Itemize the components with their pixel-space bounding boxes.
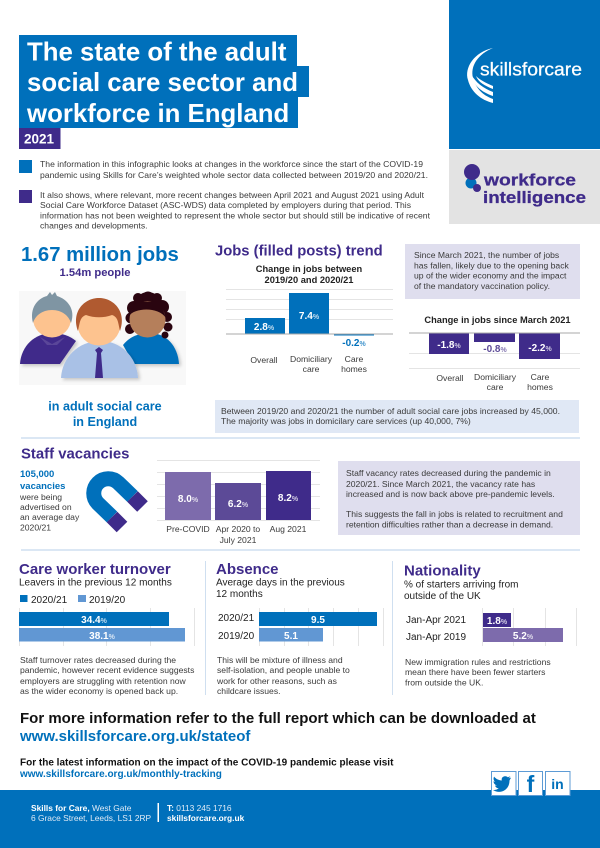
callout: jobs have fallen: Since March 2021, the number of jobs <box>414 250 559 260</box>
callout: vacancy rates: This suggests the fall in jobs is related to recruitment and <box>346 509 563 519</box>
callout: jobs increased by 45,000: The majority was jobs in domicilary care services (up 40,000, 7%) <box>221 416 471 426</box>
icon: facebook <box>518 771 542 797</box>
callout: vacancy rates: increased and is now back above pre-pandemic levels. <box>346 489 555 499</box>
footer <box>0 790 600 848</box>
call to action: monthly tracking: www.skillsforcare.org.uk/monthly-tracking <box>19 769 222 780</box>
bar chart: change in jobs since March 2021: Care <box>531 372 550 382</box>
footer: skillsforcare.org.uk <box>167 813 245 823</box>
icon: linkedin: in <box>551 776 564 792</box>
text: 105,000 vacancies: were being <box>19 492 62 502</box>
intro text: recent data: It also shows, where relevant, more recent changes between April 2021 and August 2021 using Adult <box>40 190 425 200</box>
bar chart: change in jobs since March 2021: Domiciliary <box>474 372 517 382</box>
panel: care worker turnover: as the wider economy is opened back up. <box>20 686 178 696</box>
intro text: recent data: Social Care Workforce Dataset (ASC-WDS) data completed by employers during that period. This <box>40 200 411 210</box>
call to action: full report: www.skillsforcare.org.uk/stateof <box>19 728 251 745</box>
bar chart: change in jobs since March 2021: Overall <box>436 373 464 383</box>
bar chart: change in jobs 2019/20 to 2020/21: -0.2% <box>342 338 366 349</box>
call to action: monthly tracking: For the latest information on the impact of the COVID-19 pandemic please visit <box>20 758 394 768</box>
callout: jobs have fallen: has fallen, likely due to the opening back <box>414 260 569 270</box>
bar chart: change in jobs since March 2021: -0.8% <box>483 344 508 355</box>
bar chart: change in jobs since March 2021 <box>409 315 580 392</box>
panel: care worker turnover: Leavers in the previous 12 months <box>19 578 172 588</box>
panel: care worker turnover: 2019/20 <box>89 595 126 606</box>
callout: jobs have fallen: up of the wider economy and the impact <box>414 270 567 280</box>
bar chart: change in jobs since March 2021: -1.8% <box>437 340 462 351</box>
intro text: recent data: changes and developments. <box>40 220 148 230</box>
title <box>19 35 309 128</box>
panel: absence: childcare issues. <box>217 686 281 696</box>
panel: nationality: from outside the UK. <box>405 678 483 688</box>
panel: care worker turnover: pandemic, however recent evidence suggests <box>20 665 194 675</box>
panel: absence: 5.1 <box>284 631 298 642</box>
panel: nationality: Jan-Apr 2021 <box>406 615 466 626</box>
panel: care worker turnover: Staff turnover rates decreased during the <box>20 655 176 665</box>
icon: left worker <box>20 292 76 364</box>
bar chart: change in jobs since March 2021: homes <box>527 382 553 392</box>
logo: workforce intelligence <box>449 150 600 224</box>
icon: facebook: f <box>527 771 535 797</box>
caption: in adult social care in England <box>48 400 162 429</box>
panel: absence: 2020/21 <box>218 613 255 624</box>
bar chart: change in jobs 2019/20 to 2020/21: care <box>303 364 320 374</box>
illustration: three care workers <box>19 291 186 385</box>
panel: nationality <box>404 562 576 688</box>
call to action: full report <box>19 710 536 745</box>
logo: skills for care <box>449 0 600 149</box>
callout: vacancy rates: 2020/21. Since March 2021, the vacancy rate has <box>346 479 535 489</box>
bar chart: change in jobs since March 2021: Change in jobs since March 2021 <box>424 315 571 325</box>
footer: Skills for Care, West Gate <box>31 803 132 813</box>
panel: nationality: mean there have been fewer starters <box>405 667 545 677</box>
year badge <box>19 128 60 149</box>
panel: nationality: Nationality <box>404 562 481 580</box>
panel: absence: 12 months <box>216 589 263 600</box>
panel: care worker turnover: 38.1% <box>89 631 116 642</box>
heading: staff vacancies: Staff vacancies <box>21 446 129 462</box>
panel: nationality: Jan-Apr 2019 <box>406 632 466 643</box>
panel: absence: work for other reasons, such as <box>216 676 337 686</box>
heading: jobs trend: Jobs (filled posts) trend <box>215 244 383 260</box>
text: 105,000 vacancies: vacancies <box>20 481 65 492</box>
panel: absence: 2019/20 <box>218 631 255 642</box>
text: 105,000 vacancies: an average day <box>20 512 80 522</box>
bar chart: change in jobs 2019/20 to 2020/21: homes <box>341 364 367 374</box>
bar chart: vacancy rates <box>157 460 320 545</box>
icon: right worker <box>123 292 179 364</box>
bar chart: change in jobs since March 2021: -2.2% <box>528 343 552 354</box>
bar chart: change in jobs 2019/20 to 2020/21: 7.4% <box>299 311 320 322</box>
panel: absence <box>216 561 384 696</box>
bar chart: vacancy rates: 8.2% <box>278 493 299 504</box>
footer: 6 Grace Street, Leeds, LS1 2RP <box>31 813 152 823</box>
intro text: whole sector data: The information in this infographic looks at changes in the workforce since the start of the COVID-19 <box>40 159 423 169</box>
footer: T: 0113 245 1716 <box>167 803 232 813</box>
text: 105,000 vacancies: advertised on <box>20 502 72 512</box>
callout: jobs increased by 45,000: Between 2019/20 and 2020/21 the number of adult social care jobs increased by 45,000. <box>221 406 560 416</box>
icon: magnet <box>94 479 142 527</box>
bar chart: vacancy rates: 6.2% <box>228 499 249 510</box>
caption: in adult social care in England: in England <box>73 415 137 429</box>
panel: nationality: % of starters arriving from <box>404 580 518 590</box>
panel: nationality: New immigration rules and restrictions <box>405 657 551 667</box>
panel: absence: This will be mixture of illness and <box>217 655 343 665</box>
panel: absence: Absence <box>216 561 279 578</box>
text: 105,000 vacancies: 105,000 <box>20 469 54 480</box>
panel: care worker turnover: 34.4% <box>81 615 108 626</box>
bar chart: change in jobs 2019/20 to 2020/21: 2.8% <box>254 322 275 333</box>
panel: care worker turnover <box>19 561 194 696</box>
callout: jobs have fallen <box>405 244 580 299</box>
bar chart: change in jobs 2019/20 to 2020/21: Change in jobs between <box>256 264 363 274</box>
panel: absence: 9.5 <box>311 615 325 626</box>
panel: care worker turnover: Care worker turnover <box>19 561 171 578</box>
bar chart: vacancy rates: July 2021 <box>220 535 257 545</box>
bar chart: vacancy rates: 8.0% <box>178 494 199 505</box>
panel: care worker turnover: 2020/21 <box>31 595 68 606</box>
intro text: whole sector data <box>19 159 428 180</box>
bar chart: change in jobs 2019/20 to 2020/21: Overall <box>250 355 278 365</box>
icon: twitter <box>492 772 516 796</box>
bar chart: change in jobs 2019/20 to 2020/21 <box>226 264 393 374</box>
bar chart: change in jobs 2019/20 to 2020/21: 2019/20 and 2020/21 <box>265 275 353 285</box>
panel: nationality: outside of the UK <box>404 591 481 602</box>
call to action: monthly tracking <box>19 758 394 780</box>
year badge: 2021 <box>24 132 55 146</box>
headline: 1.67 million jobs <box>21 244 179 279</box>
bar chart: change in jobs 2019/20 to 2020/21: Care <box>345 354 364 364</box>
title: workforce in England <box>26 100 289 128</box>
title: social care sector and <box>27 69 298 97</box>
logo: workforce intelligence: intelligence <box>483 188 586 207</box>
headline: 1.67 million jobs: 1.54m people <box>60 267 130 279</box>
bar chart: vacancy rates: Aug 2021 <box>270 524 307 534</box>
bar chart: change in jobs 2019/20 to 2020/21: Domiciliary <box>290 354 333 364</box>
title: The state of the adult <box>27 38 287 66</box>
callout: jobs have fallen: of the mandatory vaccination policy. <box>414 281 550 291</box>
logo: workforce intelligence: workforce <box>483 170 576 190</box>
text: 105,000 vacancies: 2020/21 <box>20 522 51 532</box>
callout: vacancy rates: retention difficulties rather than a decrease in demand. <box>346 520 553 530</box>
callout: vacancy rates: Staff vacancy rates decreased during the pandemic in <box>346 468 551 478</box>
bar chart: change in jobs since March 2021: care <box>487 382 504 392</box>
panel: absence: self-isolation, and people unable to <box>217 665 350 675</box>
icon: centre worker <box>61 298 138 378</box>
call to action: full report: For more information refer to the full report which can be downloaded at <box>20 710 536 727</box>
panel: absence: Average days in the previous <box>216 578 345 588</box>
panel: care worker turnover: employers are struggling with retention now <box>20 676 187 686</box>
caption: in adult social care in England: in adult social care <box>48 400 162 414</box>
callout: vacancy rates <box>338 461 580 535</box>
icon: linkedin <box>546 772 570 796</box>
intro text: recent data: information has not been weighted to represent the whole sector but should still be indicative of recent <box>40 210 431 220</box>
intro text: whole sector data: pandemic using Skills for Care’s weighted whole sector data collected between 2019/20 and 2020/21. <box>40 170 428 180</box>
headline: 1.67 million jobs: 1.67 million jobs <box>21 244 179 266</box>
logo: skills for care: skillsforcare <box>480 58 582 80</box>
intro text: recent data <box>19 190 431 230</box>
callout: jobs increased by 45,000 <box>215 400 579 433</box>
panel: nationality: 5.2% <box>513 631 534 642</box>
bar chart: vacancy rates: Apr 2020 to <box>216 524 260 534</box>
text: 105,000 vacancies <box>19 469 80 532</box>
bar chart: vacancy rates: Pre-COVID <box>166 524 210 534</box>
panel: nationality: 1.8% <box>487 616 508 627</box>
